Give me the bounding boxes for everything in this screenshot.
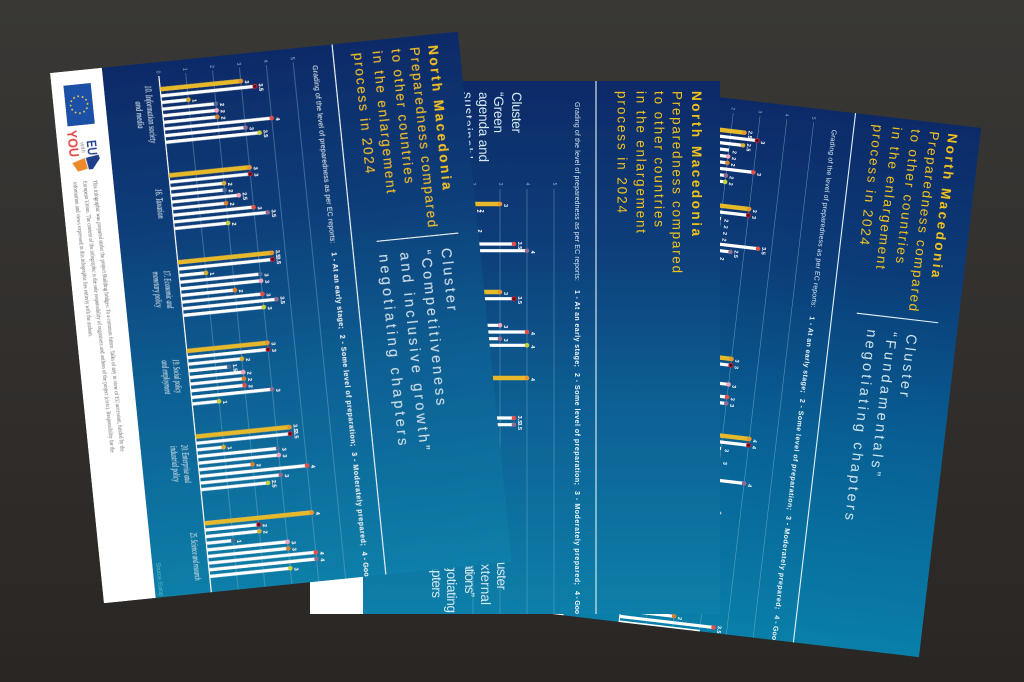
- bar group 4: 4: [751, 439, 757, 444]
- cluster heading: Green agenda: Cluster: [509, 92, 524, 134]
- bar group 1: 4: [529, 251, 535, 255]
- disclaimer text: information and views expressed in this infographic lies entirely with the authors.: [71, 182, 94, 338]
- bar group 6: 3.5: [715, 625, 722, 634]
- axis ticks: 4: [524, 183, 530, 186]
- panel: left sheet, Cluster Competitiveness and inclusive growth: [50, 32, 512, 603]
- bar group 3: [492, 376, 535, 430]
- cluster heading: [845, 330, 917, 520]
- bar group 2: 2.5: [732, 250, 739, 258]
- title: [351, 44, 458, 234]
- cluster heading: Cluster: [896, 333, 919, 398]
- cluster heading: Green agenda: [464, 92, 522, 162]
- axis ticks: [154, 57, 295, 74]
- title: North Macedonia: [928, 133, 960, 279]
- axis ticks: 5: [551, 183, 557, 186]
- bar group 4: 3: [723, 449, 729, 452]
- bar group 1: 2: [476, 229, 482, 233]
- chart: 17. Economic and monetary policy: 3.5: [278, 296, 285, 304]
- chart: 17. Economic and monetary policy: 1: [208, 272, 214, 276]
- chart: 10. Information society and media: 2: [219, 110, 225, 113]
- chart: 10. Information society and media: 3.5: [261, 130, 268, 138]
- axis ticks: 2: [730, 107, 736, 111]
- logo: EU with YOU: with: [78, 142, 85, 154]
- bar group 4: 3: [721, 461, 727, 465]
- bar group 1: 2.5: [744, 143, 751, 152]
- axis ticks: 3: [235, 62, 241, 66]
- chart: 10. Information society and media: 3.5: [257, 83, 263, 91]
- bar group 6: [619, 614, 722, 634]
- chart: 20. Enterprise and industrial policy: 3: [283, 474, 289, 478]
- axis ticks: 2: [208, 65, 214, 69]
- chart: 25. Science and research: 2: [261, 524, 267, 527]
- grading legend: 2 - Some level of preparation;: [338, 335, 356, 447]
- chart: 10. Information society and media: 3: [247, 127, 254, 130]
- title: North Macedonia: [689, 91, 704, 236]
- chart: 20. Enterprise and industrial policy: 1: [226, 446, 232, 450]
- title: Preparedness compared: [407, 46, 440, 228]
- chart: 19. Social policy and employment: [159, 340, 281, 410]
- chart: 10. Information society and media: 4: [274, 117, 280, 122]
- cluster heading: External relations: Cluster: [494, 550, 509, 590]
- chart: 10. Information society and media: and media: [133, 101, 146, 129]
- chart: 17. Economic and monetary policy: 3.5: [274, 256, 281, 265]
- grading legend: 4 - Goo: [360, 551, 369, 577]
- chart: 25. Science and research: 4: [318, 551, 324, 556]
- chart: 25. Science and research: 25. Science and research: [188, 532, 203, 581]
- chart: 25. Science and research: 2: [261, 530, 268, 534]
- source note: Source: Europ: [154, 562, 164, 597]
- bar group 3: 3.5: [516, 416, 522, 423]
- grading legend: 1 - At an early stage;: [330, 252, 344, 329]
- title: [860, 124, 958, 311]
- bar group 2: 4: [529, 332, 535, 336]
- chart: 19. Social policy and employment: 19. Social policy: [171, 359, 184, 394]
- bar group 2: 2: [722, 219, 729, 223]
- chart: 16. Taxation: 2: [226, 182, 232, 186]
- cluster heading: and inclusive growth”: [396, 251, 432, 451]
- bar group 3: [720, 355, 740, 407]
- chart: 20. Enterprise and industrial policy: [170, 424, 316, 492]
- cluster heading: Green agenda: agenda and: [476, 92, 491, 162]
- bar group 1: 2: [475, 209, 481, 213]
- chart: 16. Taxation: [152, 163, 277, 233]
- bar group 1: 2: [731, 150, 737, 154]
- disclaimer text: [71, 180, 126, 454]
- bar group 1: 2.5: [746, 131, 753, 139]
- grading legend: Grading of the level of preparedness as per EC reports:: [809, 129, 837, 308]
- logo: EU with YOU: [67, 130, 100, 172]
- chart: 10. Information society and media: 10. Information society: [143, 85, 159, 144]
- chart: 16. Taxation: 2.5: [241, 192, 247, 200]
- cluster heading: External relations: negotiating: [444, 550, 459, 613]
- chart: 19. Social policy and employment: 2: [246, 378, 252, 381]
- chart: 17. Economic and monetary policy: 3: [263, 280, 269, 284]
- axis ticks: 4: [262, 60, 268, 63]
- bar group 3: 3.5: [516, 422, 522, 430]
- grading legend: Grading of the level of preparedness as per EC reports:: [573, 102, 580, 281]
- grading legend: 4 - Goo: [573, 591, 580, 614]
- disclaimer text: This infographic was prepared under the project Building bridges: To a common future. Talks of any in view of EU accession, funded by the: [91, 180, 126, 452]
- title: in the enlargement: [369, 50, 399, 194]
- grading legend: 1 - At an early stage;: [799, 316, 815, 393]
- bar group 1: [720, 128, 765, 186]
- bar group 3: 3: [732, 366, 739, 369]
- bar group 1: [475, 202, 535, 254]
- bar group 4: [720, 433, 757, 487]
- chart: 17. Economic and monetary policy: 17. Economic and: [162, 270, 175, 309]
- bar group 1: 2: [730, 157, 736, 160]
- bar group 2: 3: [502, 292, 508, 295]
- grading legend: [770, 129, 837, 641]
- chart: 19. Social policy and employment: 3: [270, 349, 276, 352]
- cluster heading: External relations: “External: [478, 550, 493, 605]
- chart: 19. Social policy and employment: and employment: [160, 360, 173, 395]
- chart: 20. Enterprise and industrial policy: 3: [281, 454, 287, 458]
- grading legend: Grading of the level of preparedness as per EC reports:: [311, 65, 336, 244]
- icon: EU flag: [63, 83, 95, 127]
- chart: 17. Economic and monetary policy: 2: [237, 289, 243, 293]
- chart: 19. Social policy and employment: 1: [221, 400, 227, 404]
- chart: 16. Taxation: 2: [230, 222, 236, 226]
- bar group 1: 3: [759, 141, 765, 145]
- cluster heading: “Fundamentals”: [866, 331, 899, 477]
- cluster heading: Cluster: [437, 247, 460, 312]
- chart: 17. Economic and monetary policy: [150, 250, 285, 321]
- cluster heading: Green agenda: sustainable: [460, 92, 475, 167]
- bar group 2: 3: [502, 325, 508, 328]
- bar group 3: 3: [728, 404, 734, 407]
- bar group 3: 3: [733, 359, 739, 363]
- grading legend: 3 - Moderately prepared;: [350, 452, 366, 546]
- axis ticks: 5: [810, 116, 816, 120]
- chart: 20. Enterprise and industrial policy: 2: [255, 463, 261, 467]
- grading legend: 4 - Goo: [770, 615, 780, 641]
- bar group 2: 3.5: [516, 296, 522, 304]
- grading legend: [311, 65, 369, 577]
- bar group 2: 3.5: [759, 247, 766, 255]
- chart: 25. Science and research: 3: [290, 548, 297, 551]
- bar group 2: 2: [721, 231, 727, 235]
- axis ticks: 0: [154, 70, 161, 74]
- bar group 1: 2: [729, 163, 735, 167]
- axis ticks: [470, 183, 557, 186]
- title: process in 2024: [351, 52, 378, 174]
- chart: 25. Science and research: [187, 509, 325, 581]
- grading legend: [573, 102, 580, 614]
- chart: 20. Enterprise and industrial policy: industrial policy: [168, 445, 182, 482]
- bar group 2: 3: [750, 216, 756, 219]
- axis ticks: 2: [470, 183, 476, 186]
- title: in the enlargement: [873, 126, 905, 270]
- title: in the enlargement: [634, 91, 648, 233]
- chart: 16. Taxation: 3: [252, 173, 258, 177]
- chart: 16. Taxation: 16. Taxation: [153, 188, 166, 219]
- grading legend: 1 - At an early stage;: [573, 290, 580, 367]
- chart: 17. Economic and monetary policy: 3: [262, 273, 269, 277]
- axis ticks: 4: [783, 113, 790, 117]
- chart: 17. Economic and monetary policy: 3.5: [274, 250, 280, 258]
- cluster heading: negotiating chapters: [375, 253, 410, 446]
- chart: 16. Taxation: 2: [228, 202, 234, 206]
- axis ticks: 1: [181, 68, 187, 71]
- chart: 25. Science and research: 3: [290, 541, 296, 545]
- disclaimer text: European Union. The content of the infographic is the sole responsibility of organisers and authors of the project (civic). Responsibility for the: [81, 181, 116, 453]
- chart: 20. Enterprise and industrial policy: 20. Enterprise and: [179, 444, 193, 483]
- bar group 3: 3: [730, 385, 736, 388]
- cluster heading: “Competitiveness: [417, 249, 449, 406]
- chart: 17. Economic and monetary policy: 3: [264, 293, 271, 297]
- axis ticks: 5: [289, 57, 295, 60]
- chart: 19. Social policy and employment: 3: [269, 342, 276, 346]
- panel: middle sheet, Green agenda and External relations clusters: [310, 81, 721, 614]
- title: process in 2024: [614, 91, 630, 213]
- bar group 6: 2: [676, 617, 682, 620]
- bar group 2: [720, 203, 766, 260]
- bar group 1: 2: [478, 209, 484, 213]
- chart: 25. Science and research: 4: [314, 512, 320, 516]
- bar group 2: 2: [718, 257, 724, 261]
- title: Preparedness compared: [906, 131, 942, 312]
- title: Preparedness compared: [670, 91, 684, 273]
- axis ticks: [732, 108, 816, 120]
- bar group 5: [720, 512, 722, 514]
- logo: EU with YOU: YOU: [64, 129, 83, 158]
- bar group 1: 3: [502, 204, 508, 207]
- grading legend: 2 - Some level of preparation;: [785, 398, 805, 510]
- bar group 2: 3: [751, 209, 757, 213]
- chart: 10. Information society and media: 3: [243, 80, 249, 84]
- chart: 10. Information society and media: 2: [219, 116, 226, 120]
- bar group 2: 4: [529, 345, 535, 349]
- chart: 19. Social policy and employment: 2: [244, 358, 250, 362]
- axis ticks: 3: [497, 183, 503, 186]
- bar group 3: 3: [729, 397, 735, 401]
- cluster heading: External relations: relations”: [462, 550, 477, 597]
- cluster heading: External relations: [429, 562, 506, 612]
- cluster heading: External relations: chapters: [429, 550, 444, 598]
- chart: 19. Social policy and employment: 2: [247, 384, 253, 388]
- chart: 25. Science and research: 3: [292, 567, 299, 571]
- chart: 17. Economic and monetary policy: monetary policy: [151, 271, 164, 308]
- axis ticks: 3: [756, 110, 763, 114]
- grading legend: 2 - Some level of preparation;: [573, 373, 580, 485]
- bar group 4: 4: [746, 484, 752, 488]
- chart: 10. Information society and media: 2: [218, 103, 224, 107]
- chart: 16. Taxation: 2: [227, 189, 233, 193]
- grading legend: 3 - Moderately prepared;: [774, 516, 792, 610]
- chart: 25. Science and research: 4: [318, 558, 325, 563]
- title: to other countries: [388, 48, 417, 184]
- bar group 4: 4: [750, 445, 757, 450]
- chart: 20. Enterprise and industrial policy: 3.5: [291, 424, 298, 432]
- grading legend: 3 - Moderately prepared;: [573, 491, 580, 585]
- chart: 10. Information society and media: 1: [190, 99, 197, 103]
- chart: 20. Enterprise and industrial policy: 3.5: [292, 431, 299, 439]
- chart: 20. Enterprise and industrial policy: 2.5: [270, 480, 277, 488]
- chart: 16. Taxation: 3: [252, 166, 258, 170]
- title: to other countries: [652, 91, 666, 227]
- title: process in 2024: [857, 124, 886, 246]
- title: [614, 91, 704, 273]
- cluster heading: Green agenda: “Green: [491, 92, 506, 133]
- title: to other countries: [893, 128, 924, 264]
- cluster heading: negotiating chapters: [841, 328, 879, 521]
- bar group 1: 2: [727, 182, 733, 186]
- cluster heading: [378, 248, 456, 450]
- chart: 16. Taxation: 3.5: [269, 209, 276, 218]
- bar group 1: 3: [755, 173, 761, 176]
- chart: 17. Economic and monetary policy: 3: [266, 306, 272, 310]
- chart: 20. Enterprise and industrial policy: 3: [280, 448, 286, 451]
- logo: EU with YOU: EU: [84, 139, 101, 156]
- chart: 10. Information society and media: [135, 78, 280, 144]
- bar group 1: 3.5: [516, 242, 522, 249]
- bar group 2: 2: [720, 238, 727, 242]
- chart: 25. Science and research: 1: [235, 540, 241, 543]
- bar group 5: 3: [715, 511, 722, 515]
- bar group 2: [484, 290, 535, 348]
- bar group 2: 3: [502, 339, 508, 342]
- bar group 3: 4: [529, 378, 535, 382]
- chart: 19. Social policy and employment: 3: [274, 388, 280, 392]
- chart: 20. Enterprise and industrial policy: 4: [309, 465, 315, 469]
- bar group 1: 2: [728, 176, 734, 180]
- chart: 19. Social policy and employment: 2: [245, 371, 251, 375]
- title: North Macedonia: [425, 44, 455, 191]
- bar group 2: 2: [722, 225, 728, 229]
- chart: 16. Taxation: 3: [256, 206, 262, 210]
- panel: right sheet, Cluster Fundamentals: [552, 97, 981, 658]
- chart: 19. Social policy and employment: 1.5: [231, 364, 238, 372]
